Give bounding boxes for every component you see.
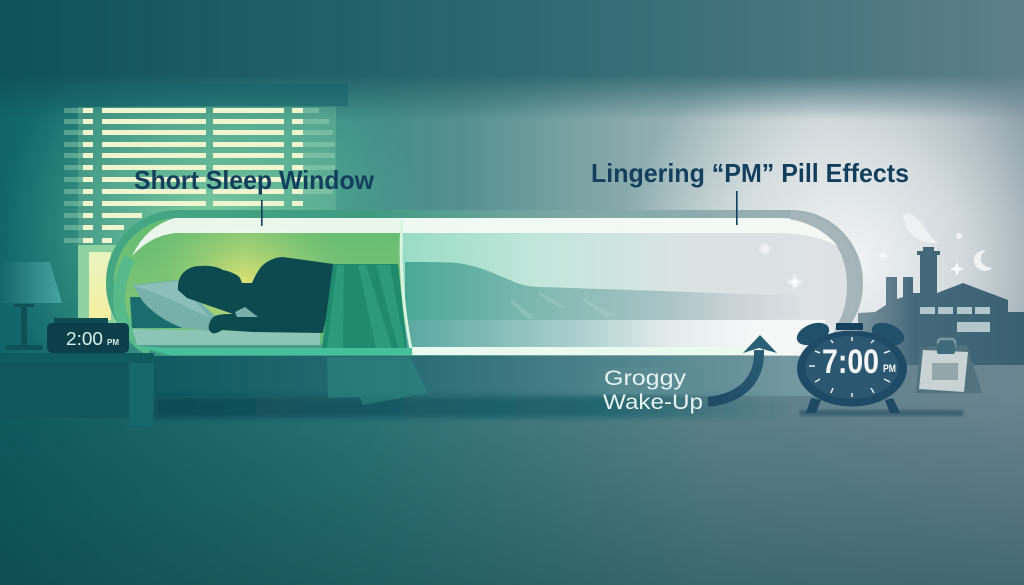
pill outer rim — [110, 214, 859, 352]
alarm clock 7:00 PM: PM — [883, 363, 896, 375]
mattress — [132, 329, 320, 345]
pill green left section — [114, 218, 405, 348]
bottom right glow — [745, 328, 845, 356]
nightstand — [0, 353, 154, 426]
star large — [950, 262, 964, 276]
pillow — [133, 280, 215, 331]
alarm clock 7:00 PM — [793, 318, 908, 413]
pill body, clear section — [110, 214, 859, 352]
pill left rim band — [119, 258, 150, 350]
smoke — [902, 214, 938, 243]
arrow — [708, 335, 777, 402]
clock ground shadow — [800, 410, 963, 416]
moon — [974, 250, 992, 271]
blanket folds — [327, 265, 344, 348]
sunlight core — [89, 252, 111, 320]
mattress shadow — [137, 345, 322, 348]
silhouette — [178, 257, 333, 333]
clock feet — [806, 398, 900, 413]
pill segment divider — [401, 220, 412, 354]
blind slats — [83, 108, 303, 243]
hazy blanket — [405, 262, 800, 320]
pale lower band — [405, 320, 825, 348]
sparkles — [760, 244, 803, 290]
pill top highlight — [132, 218, 838, 256]
blanket crease marks — [510, 292, 615, 319]
lamp — [0, 262, 62, 350]
factory skyline — [858, 214, 1024, 365]
bed shadow strip — [154, 396, 794, 418]
alarm clock 7:00 PM: 7:00 — [822, 343, 879, 381]
digital clock 2:00 PM: PM — [107, 338, 119, 347]
pill bottom highlight — [412, 347, 802, 355]
pillow wedge — [235, 307, 258, 317]
clipboard — [916, 339, 982, 393]
groggy wake-up label — [560, 367, 704, 414]
groggy wake-up label: Wake-Up — [603, 391, 703, 414]
headboard — [130, 297, 182, 328]
blanket green — [322, 264, 407, 348]
factory windows — [920, 307, 990, 332]
sunlight column — [78, 245, 118, 353]
blind slat fringe — [64, 108, 335, 243]
clock bells — [793, 318, 833, 350]
pillow crease — [135, 281, 210, 318]
pill floor band — [133, 345, 412, 355]
digital clock 2:00 PM: 2:00 — [66, 329, 103, 349]
star dot — [956, 233, 962, 239]
bed underside — [154, 356, 963, 418]
pill right rim thickening — [790, 216, 852, 332]
blanket drape below pill — [327, 357, 428, 405]
blind headrail — [64, 84, 348, 106]
window with blinds — [64, 84, 348, 353]
groggy wake-up label: Groggy — [604, 367, 687, 390]
background wall — [0, 0, 1024, 356]
star small — [878, 251, 888, 261]
clock knob — [836, 323, 863, 330]
label: Short Sleep Window: Short Sleep Window — [134, 165, 375, 195]
sleeping person — [130, 257, 407, 348]
label: Lingering PM Pill Effects: Lingering “PM” Pill Effects — [591, 158, 909, 188]
capsule pill — [100, 210, 859, 360]
clock ticks — [809, 337, 890, 397]
clock body — [797, 330, 907, 406]
floor — [0, 362, 1024, 585]
digital clock 2:00 PM — [47, 318, 129, 353]
